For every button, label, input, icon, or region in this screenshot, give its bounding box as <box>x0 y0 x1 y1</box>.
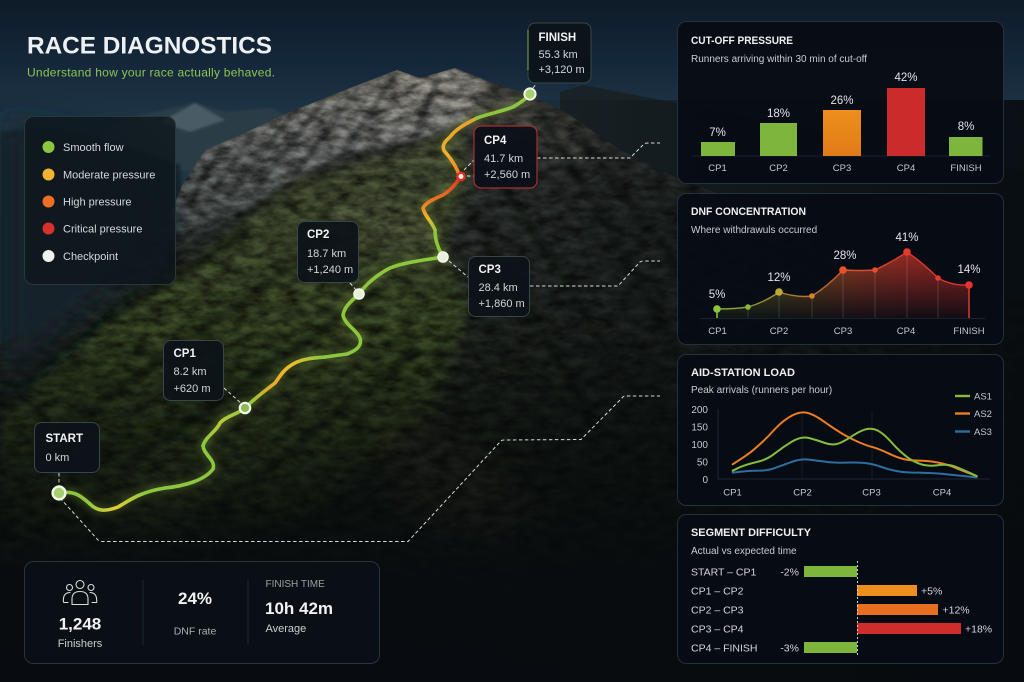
route glow <box>59 94 530 510</box>
line chart: CP1 <box>723 488 742 498</box>
area chart: FINISH <box>953 326 985 337</box>
area chart: CP2 <box>770 326 788 337</box>
heading: AID-STATION LOAD <box>691 367 795 379</box>
area chart: 28% <box>833 250 857 262</box>
checkpoint marker: CP2 <box>354 289 364 299</box>
checkpoint marker: CP3 <box>438 252 448 262</box>
checkpoint marker: finish <box>524 88 536 100</box>
line chart: 100 <box>691 440 708 451</box>
panel: DNF concentration <box>678 194 1004 344</box>
chart legend: AS1 <box>974 392 992 402</box>
diverging bar chart: CP1 – CP2 <box>691 586 744 598</box>
subtitle: Understand how your race actually behaved. <box>27 66 275 80</box>
line chart: 50 <box>697 458 708 468</box>
stat: finishers <box>58 614 103 650</box>
callout: CP3 <box>449 256 530 316</box>
callout: CP4: 41.7 km <box>484 153 523 165</box>
diverging bar chart <box>691 561 992 655</box>
legend item: critical pressure: Critical pressure <box>63 224 142 236</box>
legend item: checkpoint <box>42 250 118 263</box>
stat: finishers: Finishers <box>58 638 103 650</box>
legend item: smooth flow <box>42 141 124 154</box>
line chart: 0 <box>702 475 708 486</box>
chart legend: AS2 <box>974 409 992 420</box>
callout: CP2 <box>298 222 358 291</box>
line chart: 200 <box>691 405 708 416</box>
bar chart: 7% <box>709 127 726 139</box>
route segment: CP2 to CP3 <box>359 257 443 294</box>
diverging bar chart: -2% <box>780 566 799 578</box>
diverging bar chart: +5% <box>921 586 942 598</box>
bar chart: CP4 <box>897 163 915 174</box>
diverging bar chart: START – CP1 <box>691 566 757 578</box>
checkpoint marker: start <box>53 487 65 499</box>
callout: CP3: CP3 <box>478 264 501 276</box>
diverging bar chart: -3% <box>780 642 799 654</box>
line chart: CP2 <box>793 488 812 498</box>
dashed connector: start to aid-station panel <box>60 396 660 542</box>
callout: CP1 <box>164 340 242 404</box>
legend item: smooth flow: Smooth flow <box>63 142 124 154</box>
bar chart: FINISH <box>950 163 982 174</box>
area chart: CP4 <box>897 326 915 337</box>
stat: DNF rate: DNF rate <box>174 626 216 638</box>
callout: CP2: 18.7 km <box>307 248 346 260</box>
bar chart <box>692 72 990 174</box>
callout: CP3: +1,860 m <box>478 298 525 310</box>
callout: CP4 <box>464 126 537 188</box>
panel: aid-station load <box>678 354 1004 506</box>
chart legend <box>955 392 992 438</box>
bar chart: 18% <box>767 108 790 120</box>
stat: finishers: 1,248 <box>59 614 101 634</box>
bar chart: 26% <box>830 95 854 107</box>
heading: SEGMENT DIFFICULTY <box>691 527 812 539</box>
callout: CP1: CP1 <box>174 348 196 360</box>
dashed connector: CP4 to cut-off panel <box>537 143 660 158</box>
callout: CP2: CP2 <box>307 229 329 241</box>
bar chart: CP2 <box>769 163 788 174</box>
route segment: CP1 to CP2 <box>245 357 325 408</box>
legend item: high pressure: High pressure <box>63 196 131 208</box>
bar chart: 42% <box>894 72 918 84</box>
callout: start: 0 km <box>46 452 69 464</box>
callout: CP2: +1,240 m <box>307 264 353 276</box>
title: RACE DIAGNOSTICS <box>27 32 272 60</box>
bar chart: CP1 <box>708 163 727 174</box>
diverging bar chart: CP4 – FINISH <box>691 642 758 654</box>
description: Runners arriving within 30 min of cut-off <box>691 54 867 65</box>
line chart <box>691 392 992 498</box>
callout: finish: +3,120 m <box>538 64 585 76</box>
dashed connector: CP3 to DNF panel <box>530 261 660 286</box>
stat: finish time <box>265 579 333 635</box>
description: Actual vs expected time <box>691 546 797 557</box>
stat: finish time: 10h 42m <box>265 599 333 618</box>
callout: finish: FINISH <box>538 32 576 44</box>
callout: start <box>34 422 100 486</box>
legend panel <box>24 116 176 284</box>
panel: race summary stats <box>24 562 380 664</box>
route segment: start to CP1 <box>59 492 90 504</box>
bar chart: CP3 <box>833 163 851 174</box>
description: Where withdrawuls occurred <box>691 225 817 236</box>
callout: CP4: +2,560 m <box>484 169 530 181</box>
heading: DNF CONCENTRATION <box>691 206 806 218</box>
race route <box>59 94 530 510</box>
legend item: checkpoint: Checkpoint <box>63 251 118 263</box>
stat: finish time: FINISH TIME <box>266 579 325 590</box>
diverging bar chart: CP2 – CP3 <box>691 604 744 616</box>
panel: segment difficulty <box>678 514 1004 664</box>
area chart: CP3 <box>834 326 852 337</box>
background: mountain landscape <box>0 0 1024 526</box>
line chart: CP4 <box>933 488 951 498</box>
callout: CP4: CP4 <box>484 135 507 147</box>
line chart: 150 <box>691 422 708 434</box>
chart legend: AS3 <box>974 427 992 438</box>
checkpoint marker: CP1 <box>240 403 250 413</box>
heading: CUT-OFF PRESSURE <box>691 35 793 47</box>
panel: cut-off pressure <box>678 22 1004 184</box>
callout: finish <box>528 23 591 88</box>
area chart <box>700 232 985 337</box>
area chart: 12% <box>767 272 791 284</box>
diverging bar chart: +18% <box>965 624 992 636</box>
stat: DNF rate: 24% <box>178 589 212 608</box>
area chart: 14% <box>957 264 981 276</box>
callout: CP1: +620 m <box>174 383 210 395</box>
diverging bar chart: CP3 – CP4 <box>691 624 744 636</box>
bar chart: 8% <box>958 121 974 133</box>
callout: CP3: 28.4 km <box>478 282 518 294</box>
icon: finishers group <box>63 580 97 604</box>
route segment: CP3 to CP4 <box>435 230 443 257</box>
route segment: CP4 to finish <box>443 118 477 177</box>
description: Peak arrivals (runners per hour) <box>691 385 832 396</box>
stat: DNF rate <box>174 589 216 638</box>
callout: start: START <box>46 433 83 445</box>
callout: CP1: 8.2 km <box>174 366 207 378</box>
line chart: CP3 <box>862 488 881 498</box>
legend item: moderate pressure: Moderate pressure <box>63 170 155 182</box>
checkpoint marker: CP4 <box>457 173 465 180</box>
callout: finish: 55.3 km <box>538 49 578 61</box>
stat: finish time: Average <box>266 623 306 635</box>
area chart: 5% <box>709 289 725 301</box>
diverging bar chart: +12% <box>942 604 970 616</box>
area chart: 41% <box>895 232 919 244</box>
area chart: CP1 <box>708 326 727 337</box>
